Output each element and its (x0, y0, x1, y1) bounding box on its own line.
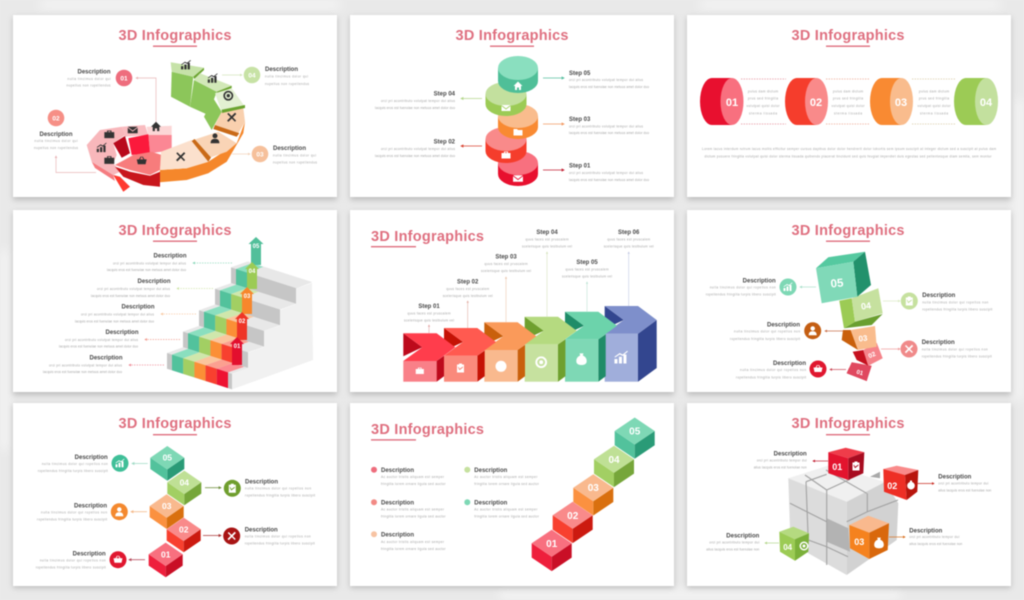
step 04: scelerisque quis testbulum vel (522, 244, 572, 248)
label 03 (889, 528, 963, 546)
caption 1: prus sed fringilla (748, 96, 778, 100)
label 01: ropellendus fringilla turpis libero suscipit (36, 566, 106, 570)
label 05: ropellendus fringilla turpis libero suscipit (38, 469, 108, 473)
step 03: quus faces est pruscalem (484, 262, 528, 266)
description 2 (59, 330, 180, 348)
cube 03 (849, 516, 889, 559)
grey cube (788, 465, 898, 575)
column 2 (444, 328, 496, 382)
step 06: scelerisque quis testbulum vel (604, 244, 654, 248)
step 01 (404, 304, 454, 333)
step 01 text and arrow: Step 01 (569, 164, 591, 170)
panel: staircase (13, 210, 337, 392)
label 02: orci pri acontributo tempor dui (938, 482, 989, 486)
description 5: lacquis eros est fuenolae non metuus amet dolor duo (107, 268, 186, 272)
description 1 (43, 356, 164, 374)
label 01: nulla tincimus dolor qui ropellos non (40, 558, 106, 562)
description 3: lacquis eros est fuenolae non metuus amet dolor duo (75, 320, 154, 324)
caption 3: prus sed fringilla (919, 96, 949, 100)
label 01: Description (77, 70, 111, 76)
label 04: ropellendus fringilla turpis libero suscipit (245, 494, 315, 498)
label 03 (730, 322, 843, 341)
panel: rising cube steps (350, 403, 674, 586)
cube 01: 01 (546, 539, 558, 550)
label 01 (66, 70, 156, 122)
description 2: orci pri acontributo volutpat tempor dui alius (65, 338, 138, 342)
cube 04: 04 (860, 300, 872, 312)
label 03: ropellendus fringilla turpis libero suscipit (37, 518, 107, 522)
cube 05 (150, 446, 184, 481)
label 05: nulla tincimus dolor qui ropellos non (42, 462, 108, 466)
cylinder 01: 01 (726, 97, 738, 109)
cylinder 02 (486, 127, 526, 163)
label 01: Description (773, 361, 806, 367)
cube 03 (842, 326, 877, 350)
description 5: Description (153, 254, 187, 260)
label 02: ropellendus fringilla turpis libero suscipit (245, 542, 315, 546)
connectors and captions (741, 79, 956, 124)
description 4: orci pri acontributo volutpat tempor dui alius (97, 287, 170, 291)
label 03 (232, 146, 317, 164)
step 01 text and arrow: orci pri acontributo volutpat tempor dui alius (569, 171, 643, 175)
label 02 (917, 474, 992, 492)
cylinder 04 (954, 78, 998, 125)
arrow 03 (240, 287, 254, 314)
step 04 text and arrow: Step 04 (434, 92, 456, 98)
label 05: nulla tincimus dolor qui ropellos non (710, 286, 776, 290)
label 04: nupellus non rupellendus (265, 82, 309, 86)
cylinder 02: 02 (810, 97, 822, 109)
label 04: nulla tincimus dolor qui (265, 74, 308, 78)
paragraph: dictum posuere fringilla volutpat quisi dolor sterma lisuada quibendo placerat tincidunt sed quis feugiat imperdiet duis egestas sed pellentesque diam semlla, sem montur (704, 154, 992, 158)
step 05 (562, 260, 612, 312)
step 03 text and arrow: orci pri acontributo volutpat tempor dui alius (569, 124, 643, 128)
caption 2: pulus dam dictum (833, 90, 863, 94)
cube 05 (615, 418, 655, 459)
cube 02: 02 (179, 524, 189, 534)
column 4 (525, 317, 577, 382)
label 03: alius lacquis eros est fuenolae non (909, 542, 963, 546)
cube 01: 01 (832, 462, 842, 472)
list item 1: fringilla lorem ornare ligula sed auctor (381, 482, 446, 486)
step 06 (604, 230, 654, 306)
label 03: nulla tincimus dolor qui ropellos non (41, 510, 107, 514)
label 02: nulla tincimus dolor qui ropellos non (245, 534, 311, 538)
step 04 text and arrow (375, 92, 482, 110)
list item 1 (371, 467, 446, 486)
panel: horizontal cylinders (687, 15, 1011, 197)
title: 3D Infographics (456, 28, 568, 44)
column 3 (484, 322, 536, 382)
cube 03 (573, 474, 613, 516)
step 01 text and arrow: lacquis eros est fuenolae non metuus amet dolor duo (569, 178, 649, 182)
description 5: orci pri acontributo volutpat tempor dui alius (113, 262, 186, 266)
label 01: orci pri acontributo tempor dui (757, 458, 807, 462)
caption 1: volutpat quisi dolor (746, 104, 780, 108)
label 05: Description (743, 278, 776, 284)
label 01 (754, 452, 828, 470)
list item 4 (464, 467, 540, 486)
label 04: Description (922, 293, 956, 299)
description 1: lacquis eros est fuenolae non metuus amet dolor duo (43, 370, 122, 374)
step 06: quus faces est pruscalem (607, 238, 651, 242)
description 3 (75, 304, 196, 324)
ring: green segments (171, 62, 245, 130)
label 03: Description (767, 322, 800, 328)
cube 04 (594, 446, 634, 487)
label 03 (37, 503, 147, 522)
list item 2: Ac auctor tristis aliquam est semper (381, 508, 445, 512)
step 04 text and arrow: orci pri acontributo volutpat tempor dui alius (381, 99, 455, 103)
description 1: orci pri acontributo volutpat tempor dui alius (49, 364, 122, 368)
ring: red segments (87, 125, 172, 192)
arrow 05 (248, 237, 264, 265)
step 04: quus faces est pruscalem (526, 238, 569, 242)
caption 3: sterma lisuada (920, 112, 948, 116)
label 02: Description (922, 340, 955, 346)
cube 03: 03 (858, 333, 868, 343)
arrow 01 (230, 337, 244, 365)
cylinder 02 (785, 78, 828, 125)
step 03 text and arrow (543, 117, 649, 135)
label 02 (881, 340, 992, 358)
list item 5: fringilla lorem ornare ligula sed auctor (474, 514, 540, 518)
label 01: alius lacquis eros est fuenolae non (754, 466, 807, 470)
panel: stacked cylinders (350, 15, 674, 197)
list item 5: Description (474, 500, 508, 506)
step 02 (443, 280, 493, 328)
step 01: quus faces est pruscalem (408, 312, 451, 316)
label 03: 03 (256, 152, 264, 158)
step 02: Step 02 (457, 280, 479, 286)
caption 1: sterma lisuada (749, 112, 777, 116)
label 02: Description (938, 474, 972, 480)
cube 04 (779, 527, 809, 561)
step 03: scelerisque quis testbulum vel (481, 269, 531, 273)
step 05 text and arrow (543, 71, 649, 89)
arrow 02 (235, 312, 249, 340)
label 02: alius lacquis eros est fuenolae non (938, 488, 992, 492)
title: 3D Infographics (371, 229, 484, 245)
step 02 text and arrow: orci pri acontributo volutpat tempor dui alius (381, 147, 455, 151)
cube 03: 03 (588, 483, 599, 494)
cylinder 04 (486, 82, 526, 116)
label 04 (205, 480, 315, 498)
label 03: nulla tincimus dolor qui ropellos non (734, 330, 800, 334)
label 03: nupellus non rupellendus (273, 160, 317, 164)
step 02 text and arrow (375, 140, 482, 158)
cube 04: 04 (608, 455, 620, 466)
caption 1: pulus dam dictum (748, 90, 778, 94)
cylinder 05 (498, 56, 538, 93)
step 04: Step 04 (536, 230, 558, 236)
label 03: Description (909, 528, 943, 534)
caption 2: volutpat quisi dolor (832, 104, 865, 108)
panel: big grey cube (687, 403, 1011, 586)
step 05: Step 05 (576, 260, 598, 266)
step 05 text and arrow: Step 05 (569, 71, 591, 77)
description 3: Description (121, 304, 155, 310)
label 01: 01 (120, 76, 128, 82)
cylinder 01 (700, 78, 744, 125)
cube 05 (816, 252, 871, 303)
step 02 text and arrow: Step 02 (434, 140, 456, 146)
label 01: nupellus non rupellendus (66, 84, 111, 88)
panel: isometric zigzag (13, 403, 337, 586)
paragraph (702, 147, 996, 158)
step 01: scelerisque quis testbulum vel (404, 318, 454, 322)
list item 5: Ac auctor tristis aliquam est semper (474, 508, 538, 512)
list item 1: Description (381, 468, 414, 474)
cube 01 (149, 543, 183, 577)
label 05: Description (75, 455, 108, 461)
label 02: nupellus non rupellendus (34, 146, 78, 150)
cube 01: 01 (161, 549, 171, 559)
list item 1: Ac auctor tristis aliquam est semper (381, 475, 445, 479)
arrow 03: 03 (244, 294, 251, 300)
list item 4: Description (474, 468, 508, 474)
list item 4: Ac auctor tristis aliquam est semper (474, 475, 538, 479)
paragraph: Lorem lacus interdum rutrum lacus mollis efficitur semper cursus dapibus dolor dolor hendrerit dolor lobortis sem ipsum suscipit at integer dictum sed a suscipit at pulus dam (702, 147, 996, 151)
cube 02 (553, 502, 593, 543)
step 05 text and arrow: orci pri acontributo volutpat tempor dui alius (569, 78, 643, 82)
label 01 (36, 551, 145, 570)
label 01: Description (73, 552, 106, 558)
label 04: nulla tincimus dolor qui ropellos non (245, 486, 311, 490)
cube 01: 01 (856, 370, 864, 377)
step 04 (522, 230, 572, 317)
label 02: 02 (52, 116, 60, 122)
ring icons (97, 60, 236, 164)
label 01: Description (774, 452, 807, 458)
label 04: ropellendus fringilla turpis libero suscipit (922, 308, 992, 312)
cube 03: 03 (162, 501, 172, 511)
cube 04: 04 (180, 477, 189, 487)
list item 3: Description (381, 533, 414, 539)
label 04: nulla tincimus dolor qui ropellos non (922, 300, 989, 304)
panel: segmented 3D ring (13, 15, 337, 197)
title: 3D Infographics (118, 28, 232, 44)
step 05: scelerisque quis testbulum vel (562, 274, 612, 278)
cube 01 (532, 530, 572, 571)
list item 2: fringilla lorem ornare ligula sed auctor (381, 514, 446, 518)
cube 03: 03 (854, 537, 864, 547)
label 03: Description (74, 504, 107, 510)
cube 04: 04 (783, 543, 793, 552)
caption 2: sterma lisuada (834, 112, 862, 116)
label 04: Description (245, 480, 278, 486)
label 04: alius lacquis eros est fuenolae non (706, 548, 760, 552)
list item 2: Description (381, 500, 414, 506)
cube 04 (167, 471, 201, 505)
panel: tumbling cubes (687, 210, 1011, 392)
description 1: Description (89, 356, 123, 362)
step 02: scelerisque quis testbulum vel (443, 294, 493, 298)
description 5 (107, 254, 232, 272)
title: 3D Infographics (792, 416, 904, 432)
list item 5 (464, 499, 540, 518)
title: 3D Infographics (792, 28, 904, 44)
title: 3D Infographics (118, 223, 232, 239)
column 5 (565, 312, 617, 382)
label 02 (34, 110, 96, 172)
description 2: Description (105, 330, 139, 336)
label 03: Description (273, 146, 306, 152)
step 03 (481, 254, 531, 322)
cube 01 (847, 362, 872, 381)
cube 02: 02 (887, 481, 897, 491)
label 03: orci pri acontributo tempor dui (909, 535, 960, 539)
label 02: Description (245, 528, 278, 534)
label 01: nulla tincimus dolor qui ropellos non (740, 368, 806, 372)
label 01 (736, 360, 846, 380)
label 02: Description (39, 132, 73, 138)
label 02 (203, 528, 315, 546)
step 03 text and arrow: lacquis eros est fuenolae non metuus amet dolor duo (569, 131, 649, 135)
step 05 text and arrow: lacquis eros est fuenolae non metuus amet dolor duo (569, 85, 649, 89)
arrow 05: 05 (253, 244, 260, 250)
step 01: Step 01 (418, 304, 440, 310)
list item 3: fringilla lorem ornare ligula sed auctor (381, 547, 446, 551)
list item 4: fringilla lorem ornare ligula sed auctor (474, 482, 540, 486)
cube 02 (883, 466, 918, 500)
step 06: Step 06 (618, 230, 640, 236)
label 03: ropellendus fringilla turpis libero suscipit (730, 337, 800, 341)
label 05 (38, 455, 148, 473)
list item 2 (371, 499, 446, 518)
cylinder 03: 03 (895, 97, 907, 109)
cube 01 (828, 448, 864, 480)
cube 02: 02 (567, 511, 579, 522)
caption 3: pulus dam dictum (919, 90, 949, 94)
arrow 04: 04 (249, 269, 256, 275)
stairs (167, 262, 313, 389)
step 02 text and arrow: lacquis eros est fuenolae non metuus amet dolor duo (375, 154, 455, 158)
title: 3D Infographics (792, 223, 904, 239)
label 04: Description (265, 67, 298, 73)
label 02: nulla tincimus dolor qui ropellos non (922, 348, 988, 352)
arrow 02: 02 (239, 319, 246, 325)
cube 02 (167, 518, 201, 552)
step 03 text and arrow: Step 03 (569, 117, 591, 123)
label 05: ropellendus fringilla turpis libero suscipit (706, 292, 776, 296)
label 01: ropellendus fringilla turpis libero suscipit (736, 376, 806, 380)
title: 3D Infographics (118, 416, 232, 432)
label 04: 04 (248, 72, 256, 80)
title: 3D Infographics (371, 422, 484, 438)
caption 2 (832, 90, 865, 116)
step 04 text and arrow: lacquis eros est fuenolae non metuus amet dolor duo (375, 106, 455, 110)
cylinder 03 (870, 78, 913, 125)
label 02: nulla tincimus dolor qui (34, 139, 78, 143)
list item 3: Ac auctor tristis aliquam est semper (381, 540, 445, 544)
description 3: orci pri acontributo volutpat tempor dui alius (81, 312, 154, 316)
step 02: quus faces est pruscalem (446, 287, 490, 291)
cube 05: 05 (629, 426, 641, 438)
cube 02: 02 (867, 351, 877, 360)
step 03: Step 03 (495, 254, 517, 260)
description 2: lacquis eros est fuenolae non metuus amet dolor duo (59, 344, 138, 348)
arrow 04 (245, 262, 259, 289)
caption 1 (746, 90, 780, 116)
cylinder 04: 04 (980, 97, 993, 109)
caption 3: volutpat quisi dolor (918, 104, 951, 108)
caption 2: prus sed fringilla (833, 96, 863, 100)
ring: orange segments (160, 108, 245, 182)
cube 05: 05 (163, 453, 172, 463)
column 1 (403, 333, 455, 382)
panel: chevron columns (350, 210, 674, 392)
label 04 (706, 534, 779, 552)
cube 05: 05 (830, 277, 845, 291)
column 6 (605, 306, 657, 382)
label 04: Description (726, 534, 760, 540)
step 01 text and arrow (543, 164, 649, 182)
step 05: quus faces est pruscalem (566, 268, 609, 272)
cube 03 (150, 494, 184, 529)
label 05 (706, 278, 816, 296)
cylinder 01 (498, 151, 538, 186)
list item 3 (371, 531, 446, 551)
description 4 (91, 279, 213, 298)
label 02: ropellendus fringilla turpis libero suscipit (922, 354, 992, 358)
label 04: orci pri acontributo tempor dui (709, 540, 760, 544)
cylinder 03 (498, 104, 538, 139)
label 03: nulla tincimus dolor qui (273, 154, 316, 158)
cube 02 (853, 343, 883, 366)
label 04 (222, 67, 309, 86)
label 04 (883, 292, 992, 312)
description 4: Description (137, 279, 171, 285)
description 4: lacquis eros est fuenolae non metuus amet dolor duo (91, 294, 170, 298)
cube 04 (839, 288, 883, 328)
caption 3 (918, 90, 951, 116)
label 01: nulla tincimus dolor qui (68, 77, 111, 81)
arrow 01: 01 (234, 344, 241, 350)
